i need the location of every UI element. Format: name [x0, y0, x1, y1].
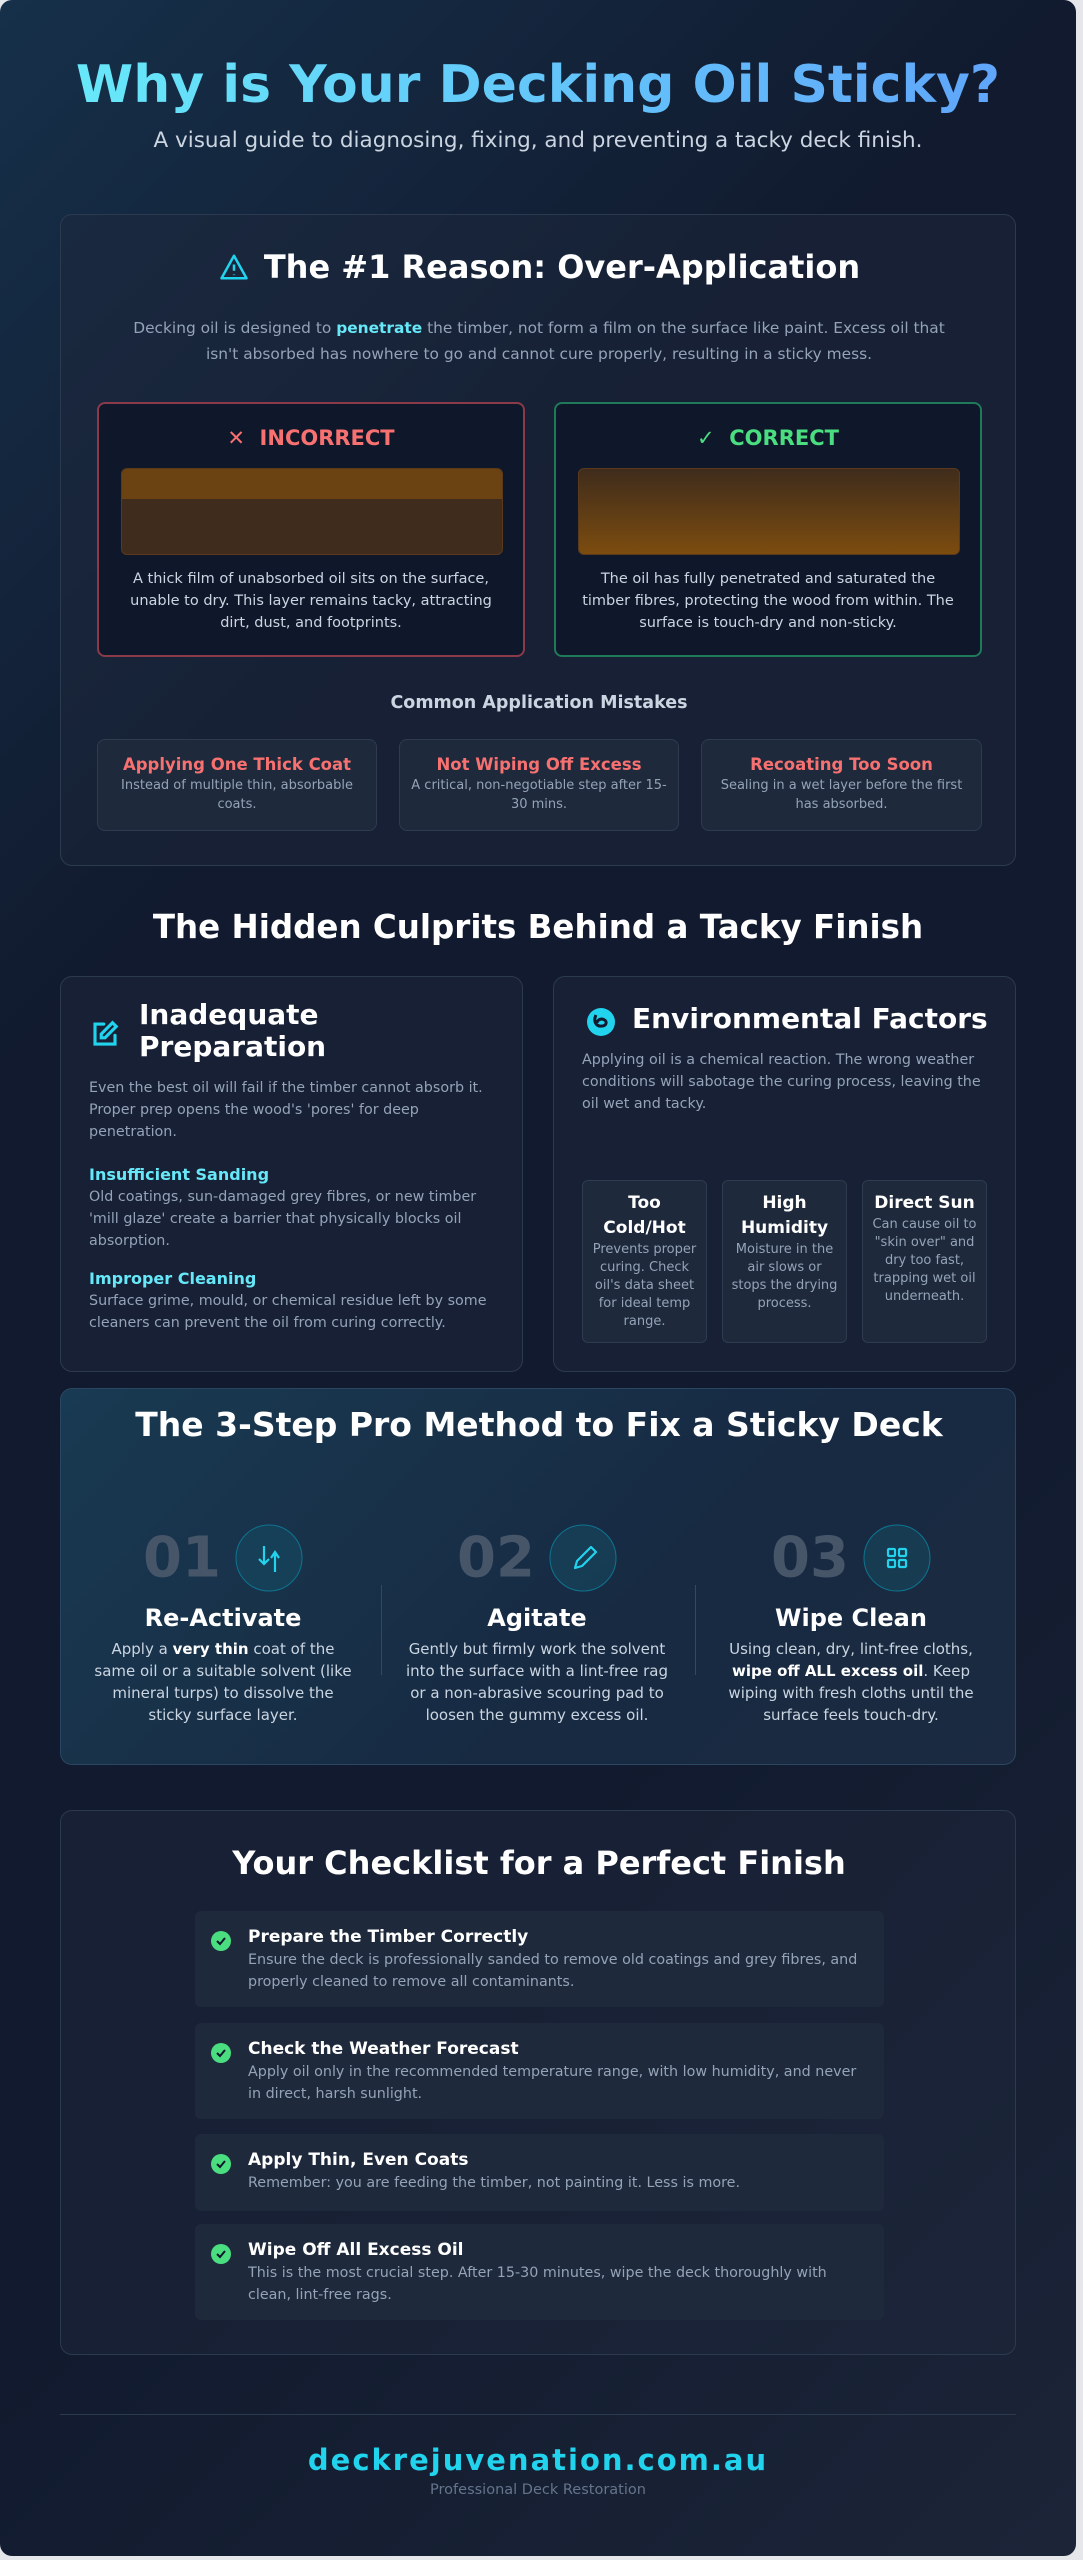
- footer: url: deckrejuvenation.com.au: [308, 2443, 768, 2477]
- intro text: Decking oil is designed to penetrate the timber, not form a film on the surface like paint. Excess oil that isn't absorbed has nowhere to go and cannot cure properly, resulting in a sticky mess.: [133, 319, 945, 363]
- panel: environmental factors: [553, 976, 1016, 1372]
- item 2: [195, 2023, 884, 2119]
- mistake 1: [97, 739, 377, 831]
- icon: edit: [93, 1020, 118, 1046]
- desc correct: The oil has fully penetrated and saturated the timber fibres, protecting the wood from within. The surface is touch-dry and non-sticky.: [582, 571, 954, 631]
- item 3: Apply Thin, Even Coats: [248, 2150, 468, 2170]
- label: incorrect: ✕ INCORRECT: [227, 426, 395, 450]
- heading: hidden culprits: The Hidden Culprits Behind a Tacky Finish: [153, 908, 923, 946]
- text block: prep: [89, 1080, 486, 1331]
- mistake 3: Recoating Too Soon: [750, 755, 933, 774]
- card: humidity: High Humidity: [741, 1193, 828, 1238]
- heading: #1 reason: The #1 Reason: Over-Application: [264, 248, 860, 286]
- card: cold/hot: Prevents proper curing. Check oil's data sheet for ideal temp range.: [593, 1242, 696, 1329]
- item 3: [195, 2134, 884, 2211]
- mistake cards: [97, 739, 982, 831]
- incorrect box: [97, 402, 525, 657]
- item 4: This is the most crucial step. After 15-30 minutes, wipe the deck thoroughly with clean, lint-free rags.: [248, 2265, 827, 2303]
- footer: tagline: Professional Deck Restoration: [430, 2482, 646, 2498]
- card: sun: Can cause oil to "skin over" and dry too fast, trapping wet oil underneath.: [872, 1217, 977, 1304]
- step 2: Agitate: [487, 1604, 587, 1632]
- mistake 2: [399, 739, 679, 831]
- item 1: [195, 1911, 884, 2007]
- text block: prep: Surface grime, mould, or chemical residue left by some cleaners can prevent the oil from curing correctly.: [89, 1293, 486, 1331]
- heading: environmental factors: Environmental Factors: [632, 1002, 988, 1035]
- step 3: Using clean, dry, lint-free cloths, wipe off ALL excess oil. Keep wiping with fresh cloths until the surface feels touch-dry.: [728, 1640, 974, 1724]
- label: correct: ✓ CORRECT: [697, 426, 839, 450]
- text block: prep: Improper Cleaning: [89, 1269, 256, 1288]
- heading: 3-step: The 3-Step Pro Method to Fix a Sticky Deck: [135, 1405, 943, 1444]
- mistake 2: Not Wiping Off Excess: [436, 755, 642, 774]
- number + icon: 01: [143, 1526, 221, 1590]
- step 2: [406, 1524, 668, 1724]
- item 4: [195, 2224, 884, 2320]
- card: sun: [862, 1180, 987, 1343]
- correct box: [554, 402, 982, 657]
- item 1: Prepare the Timber Correctly: [248, 1927, 528, 1947]
- text block: prep: Old coatings, sun-damaged grey fibres, or new timber 'mill glaze' create a barrier that physically blocks oil absorption.: [89, 1189, 476, 1249]
- panel: inadequate preparation: [60, 976, 523, 1372]
- card: cold/hot: Too Cold/Hot: [603, 1193, 686, 1238]
- mistake 1: Applying One Thick Coat: [123, 755, 351, 774]
- panel: 3-step method: [60, 1388, 1016, 1765]
- env cards: [582, 1180, 987, 1343]
- text: env intro: Applying oil is a chemical reaction. The wrong weather conditions will sabotage the curing process, leaving the oil wet and tacky.: [582, 1052, 981, 1112]
- heading: inadequate preparation: Inadequate Preparation: [139, 998, 326, 1063]
- panel: over-application: [60, 214, 1016, 866]
- desc incorrect: A thick film of unabsorbed oil sits on the surface, unable to dry. This layer remains tacky, attracting dirt, dust, and footprints.: [130, 571, 492, 631]
- step 1: Re-Activate: [145, 1604, 301, 1632]
- text block: prep: Even the best oil will fail if the timber cannot absorb it. Proper prep opens the wood's 'pores' for deep penetration.: [89, 1080, 483, 1140]
- mistake 1: Instead of multiple thin, absorbable coats.: [121, 778, 353, 812]
- card: humidity: Moisture in the air slows or stops the drying process.: [732, 1242, 837, 1311]
- card: humidity: [722, 1180, 847, 1343]
- text block: prep: Insufficient Sanding: [89, 1165, 269, 1184]
- step 1: Apply a very thin coat of the same oil or a suitable solvent (like mineral turps) to dissolve the sticky surface layer.: [94, 1640, 352, 1724]
- icon: warning: [220, 254, 248, 280]
- title: Why is Your Decking Oil Sticky?: [76, 55, 1000, 115]
- item 2: Apply oil only in the recommended temperature range, with low humidity, and never in direct, harsh sunlight.: [248, 2064, 856, 2102]
- mistake 2: A critical, non-negotiable step after 15-30 mins.: [411, 778, 667, 812]
- subheading: mistakes: Common Application Mistakes: [390, 693, 688, 713]
- step 3: [728, 1524, 974, 1724]
- number + icon: [143, 1524, 302, 1592]
- wood: thick film: [121, 468, 503, 555]
- heading: checklist: Your Checklist for a Perfect Finish: [232, 1844, 846, 1882]
- step 2: 02: [457, 1526, 535, 1590]
- subtitle: A visual guide to diagnosing, fixing, and preventing a tacky deck finish.: [153, 128, 923, 153]
- step 2: Gently but firmly work the solvent into the surface with a lint-free rag or a non-abrasive scouring pad to loosen the gummy excess oil.: [406, 1640, 668, 1724]
- item 1: Ensure the deck is professionally sanded to remove old coatings and grey fibres, and properly cleaned to remove all contaminants.: [248, 1952, 857, 1990]
- panel: checklist: [60, 1810, 1016, 2355]
- step 3: 03: [771, 1526, 849, 1590]
- icon: environment: [587, 1008, 615, 1036]
- card: cold/hot: [582, 1180, 707, 1343]
- item 2: Check the Weather Forecast: [248, 2039, 519, 2059]
- item 4: Wipe Off All Excess Oil: [248, 2240, 464, 2260]
- card: sun: Direct Sun: [874, 1193, 975, 1213]
- step 1: [94, 1524, 352, 1724]
- checklist items: [195, 1911, 857, 2320]
- item 3: Remember: you are feeding the timber, not painting it. Less is more.: [248, 2175, 740, 2191]
- step 3: Wipe Clean: [775, 1604, 927, 1632]
- wood: penetrated: [578, 468, 960, 555]
- mistake 3: Sealing in a wet layer before the first has absorbed.: [721, 778, 962, 812]
- mistake 3: [701, 739, 982, 831]
